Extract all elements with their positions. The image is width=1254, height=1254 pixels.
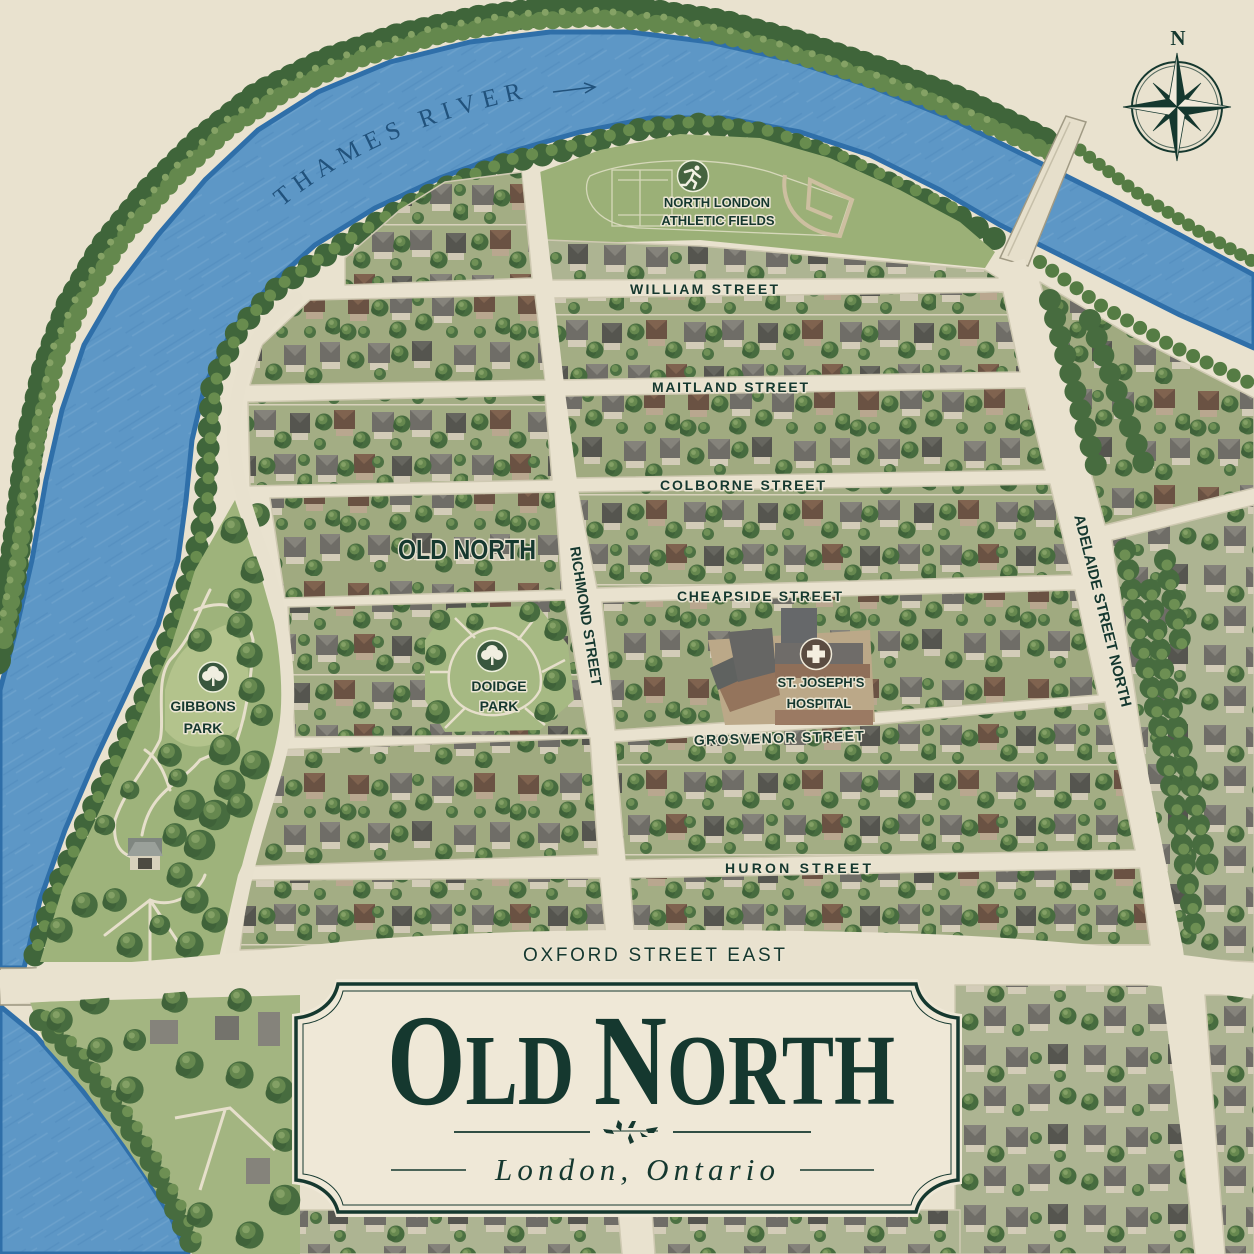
inner bank tree line	[35, 121, 1254, 955]
label: Grosvenor Street: GROSVENOR STREET	[694, 728, 864, 748]
south-west riverside park	[30, 986, 300, 1254]
icon: medical cross	[800, 638, 832, 670]
divider with sprig	[454, 1120, 811, 1144]
label: Cheapside Street: CHEAPSIDE STREET	[677, 588, 842, 604]
blocks south of Oxford Street	[290, 985, 1254, 1254]
title cartouche	[292, 979, 962, 1217]
north compass rose	[1123, 53, 1231, 161]
subtitle with side rules: London, Ontario	[494, 1152, 775, 1187]
label: Huron Street: HURON STREET	[725, 860, 871, 876]
field markings	[587, 161, 850, 236]
tree belts east of Adelaide Street	[1050, 300, 1212, 935]
north London athletic fields	[540, 134, 995, 268]
river label: Thames River: THAMES RIVER	[272, 84, 523, 204]
label: Adelaide Street North: ADELAIDE STREET NORTH	[1070, 513, 1135, 709]
Richmond Street road	[531, 170, 640, 1254]
Doidge Park	[425, 602, 574, 732]
label: Oxford Street East: OXFORD STREET EAST	[523, 945, 785, 966]
icon: tree	[476, 640, 508, 672]
label: Colborne Street: COLBORNE STREET	[660, 477, 825, 493]
compass ring	[1132, 62, 1222, 152]
park octagon	[425, 606, 574, 732]
west wing	[710, 640, 780, 712]
Oxford Street East road	[0, 947, 1254, 987]
diagonal points	[1153, 83, 1201, 131]
central meadow	[165, 625, 248, 747]
outer bank tree line	[0, 10, 1254, 660]
arrow: river flow	[553, 83, 595, 93]
west boundary road	[232, 298, 296, 955]
label: Gibbons Park: PARK	[184, 720, 222, 736]
cardinal points	[1123, 53, 1231, 161]
Gibbons Park	[40, 500, 290, 962]
west Oxford bridge	[0, 968, 36, 1005]
park trees	[425, 602, 567, 724]
blocks east of Richmond Street	[546, 240, 1150, 945]
river: Thames south branch	[0, 1006, 188, 1254]
blocks west of Richmond Street	[240, 172, 606, 950]
label: Gibbons Park: GIBBONS	[170, 698, 236, 714]
main title: OLD NORTH	[387, 989, 895, 1133]
St. Joseph's Hospital	[708, 608, 875, 725]
label: Doidge Park: PARK	[480, 698, 518, 714]
park paths	[430, 618, 565, 728]
central block	[781, 608, 817, 646]
baseball diamond	[784, 175, 852, 236]
district label: Old North: OLD NORTH	[398, 534, 536, 565]
neighbourhood blocks	[240, 172, 1254, 1254]
field lawn	[540, 134, 995, 268]
north wing	[728, 628, 776, 682]
label: Maitland Street: MAITLAND STREET	[652, 379, 808, 395]
label: St. Joseph's Hospital: ST. JOSEPH'S	[778, 675, 865, 690]
cartouche frame	[292, 979, 962, 1217]
blocks east of Adelaide Street	[1040, 282, 1254, 962]
label: William Street: WILLIAM STREET	[630, 281, 778, 297]
park paths	[105, 590, 253, 960]
label: Richmond Street: RICHMOND STREET	[566, 545, 604, 687]
park pavilion	[127, 838, 163, 870]
compass north letter: N	[1170, 26, 1186, 50]
icon: runner	[678, 160, 708, 192]
north-east bridge	[1000, 116, 1086, 266]
hospital grounds	[708, 630, 875, 725]
label: North London Athletic Fields: ATHLETIC FIELDS	[661, 213, 775, 228]
park lawn	[40, 500, 290, 962]
park tree clusters	[46, 503, 273, 959]
Adelaide Street North road	[1012, 262, 1210, 1254]
label: Doidge Park: DOIDGE	[471, 678, 527, 694]
river: Thames north branch	[0, 32, 1254, 968]
street labels	[523, 281, 1135, 966]
south wing	[775, 710, 873, 725]
label: North London Athletic Fields: NORTH LONDON	[664, 195, 770, 210]
icon: tree	[198, 662, 228, 692]
label: St. Joseph's Hospital: HOSPITAL	[787, 696, 851, 711]
